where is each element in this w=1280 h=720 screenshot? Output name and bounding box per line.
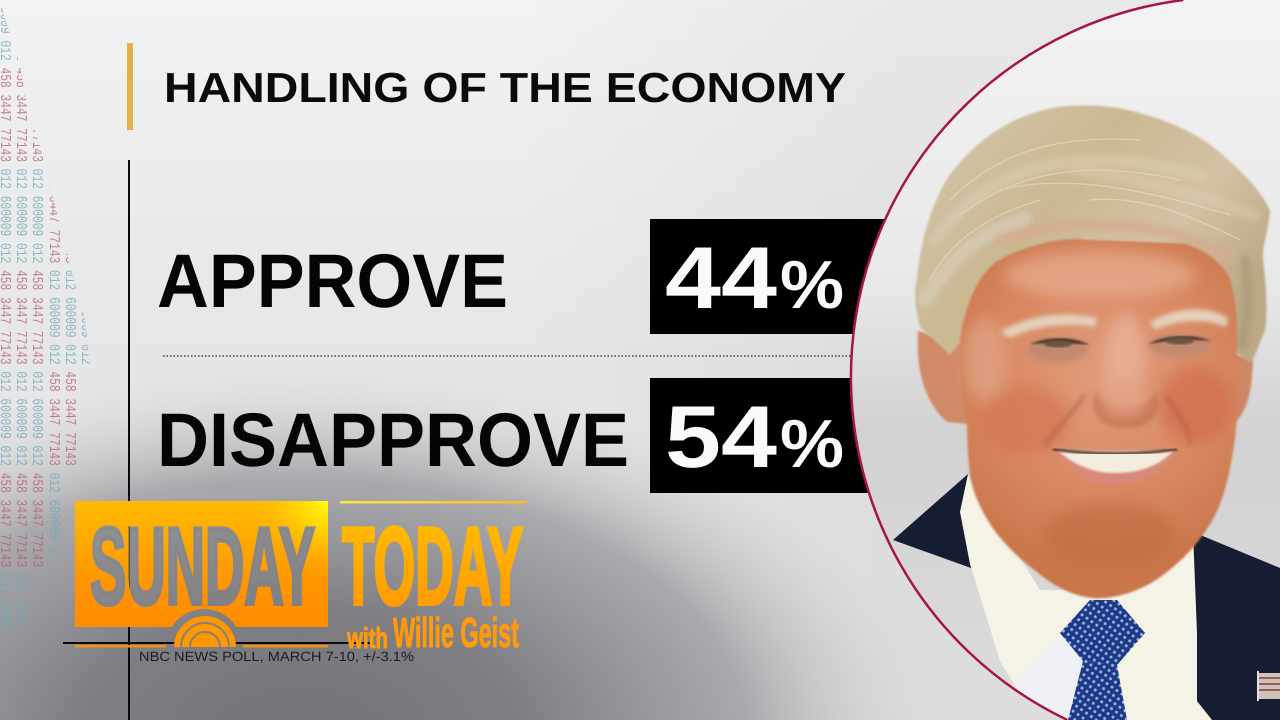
footer rule — [63, 642, 370, 644]
mouth — [1053, 449, 1177, 486]
disapprove value box: % — [780, 406, 844, 482]
tie — [1060, 600, 1145, 720]
eyes — [1028, 333, 1212, 363]
sunday block — [75, 501, 328, 627]
approve value box: % — [780, 247, 844, 323]
portrait — [893, 105, 1280, 720]
face — [959, 239, 1238, 598]
suit — [893, 474, 1280, 720]
rainbow icon — [174, 616, 236, 647]
background number texture: 00009 012 458 3447 77143 012 600009 012 458 3447 77143 012 600009 012 458 3447 77143 012 6000 — [12, 0, 29, 628]
with willie geist: with — [346, 623, 388, 655]
approve value box: 44 — [665, 228, 777, 327]
background number texture: 447 77143 012 600009 012 458 3447 77143 012 600009 012 458 3447 77143 — [61, 0, 78, 466]
left ear — [918, 331, 970, 424]
hair strands — [925, 139, 1255, 345]
with willie geist — [346, 609, 519, 656]
eyebrows — [1000, 309, 1228, 338]
right ear — [1235, 354, 1254, 422]
heading accent bar — [127, 43, 133, 130]
background number texture: 447 77143 012 600009 012 458 3447 77143 012 600009 012 — [77, 0, 94, 365]
flag pin — [1257, 671, 1280, 701]
sunday today logo: SUNDAY — [90, 505, 315, 628]
disapprove value box: 54 — [665, 387, 777, 486]
portrait circle — [851, 0, 1280, 720]
approve value box — [650, 219, 890, 334]
hair — [915, 105, 1270, 363]
row divider — [163, 355, 855, 357]
with willie geist: Willie Geist — [393, 609, 519, 656]
heading: HANDLING OF THE ECONOMY — [164, 64, 846, 111]
shirt lower panel — [1013, 637, 1082, 718]
background number texture — [0, 0, 94, 628]
row label: approve: APPROVE — [157, 239, 508, 324]
smile lines — [1045, 395, 1190, 447]
today top line — [340, 501, 526, 504]
nose — [1092, 392, 1158, 429]
bottom lines — [75, 645, 328, 648]
face shading — [963, 251, 1231, 567]
source note: NBC NEWS POLL, MARCH 7-10, +/-3.1% — [139, 649, 414, 664]
background number texture: 447 77143 012 600009 012 458 3447 77143 012 600009 012 458 3447 77143 012 600009 012 — [45, 0, 62, 567]
disapprove value box — [650, 378, 890, 493]
shirt — [960, 474, 1212, 720]
background number texture: 00009 012 458 3447 77143 012 600009 012 458 3447 77143 012 600009 012 458 3447 77143 — [28, 0, 45, 567]
text: TODAY — [342, 505, 523, 628]
vertical axis line — [128, 160, 130, 720]
portrait ring — [851, 0, 1183, 720]
row label: disapprove: DISAPPROVE — [157, 398, 629, 483]
